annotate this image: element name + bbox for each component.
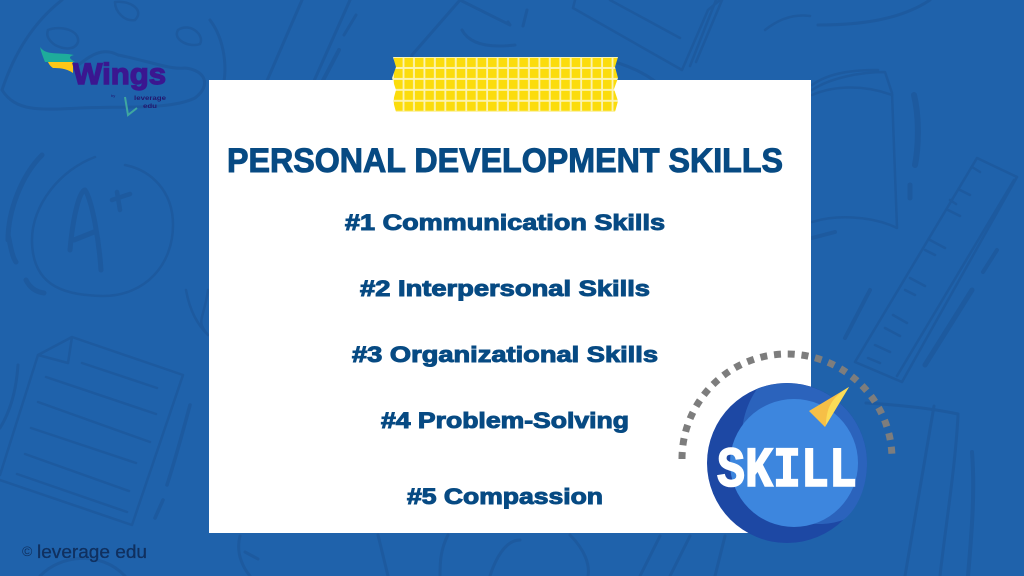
skill 5: #5 Compassion: [407, 484, 603, 509]
doodle: top right book: [573, 0, 930, 90]
doodle: top centre pencils: [210, 0, 527, 90]
doodle: ruler: [845, 158, 1017, 382]
copyright: ©: [22, 543, 33, 559]
doodle: A+ badge: [8, 155, 208, 335]
SKILL label: SKILL: [717, 440, 857, 504]
logo: Wings: edu: [143, 103, 157, 110]
doodle: bottom edge: [40, 535, 725, 576]
doodle: open book right: [812, 70, 918, 238]
skill badge: [682, 354, 892, 543]
logo sub-text: leverage: [134, 95, 166, 102]
doodle: paper sheet: [0, 337, 190, 525]
logo wordmark: Wings: [73, 58, 166, 91]
skill 2: #2 Interpersonal Skills: [360, 276, 650, 301]
logo wing yellow: [48, 62, 73, 73]
logo: Wings: [40, 47, 166, 115]
pointer: [809, 387, 849, 427]
dotted gauge arc: [682, 354, 892, 459]
logo sub-mark: [125, 97, 137, 115]
badge circle: [707, 383, 867, 543]
logo wing teal: [40, 47, 75, 62]
title: PERSONAL DEVELOPMENT SKILLS: [227, 142, 783, 180]
white panel: [209, 80, 811, 533]
copyright: leverage edu: [37, 542, 147, 562]
skills list: [345, 210, 665, 509]
doodle: bottom right pencil: [866, 403, 973, 576]
skill 3: #3 Organizational Skills: [352, 342, 658, 367]
skill 4: #4 Problem-Solving: [381, 408, 629, 433]
skill 1: #1 Communication Skills: [345, 210, 665, 235]
doodle: brain top left: [2, 0, 205, 109]
washi tape: [392, 57, 618, 112]
logo by-line: by: [111, 93, 115, 98]
